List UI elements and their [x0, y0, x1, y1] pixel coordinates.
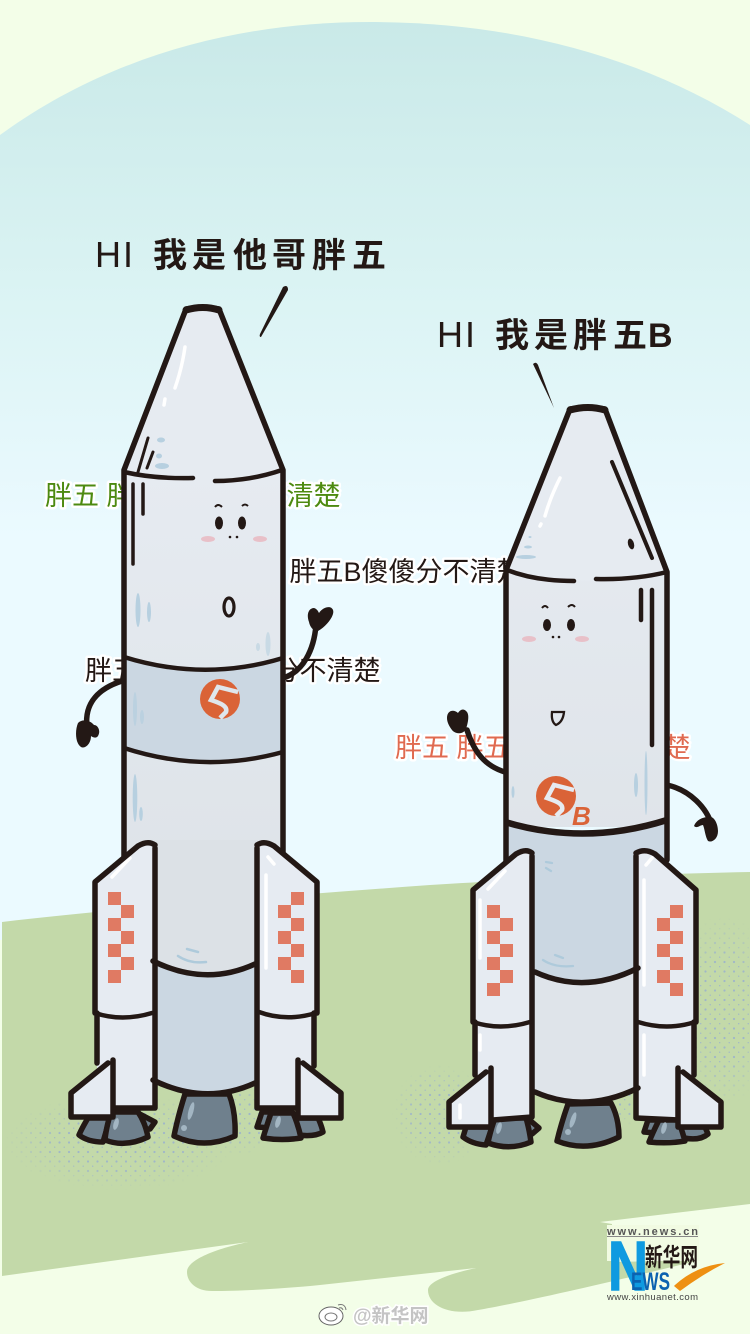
- news logo: www.xinhuanet.com: [606, 1292, 698, 1303]
- news logo: [606, 1225, 725, 1305]
- heading: small rocket speech: HI: [437, 314, 477, 355]
- body: [124, 470, 283, 860]
- left booster B: [448, 851, 532, 1127]
- highlights and stains B: [512, 478, 648, 966]
- red caption: 胖五 胖五B傻傻分不清楚: [395, 733, 691, 763]
- weibo watermark: [319, 1305, 429, 1327]
- sky dome: [0, 22, 750, 940]
- centre nozzle B: [557, 1103, 619, 1146]
- heading: small rocket speech: 是: [534, 317, 568, 355]
- green caption: 胖五 胖五B傻傻分不清楚: [45, 481, 341, 511]
- centre nozzle: [174, 1094, 235, 1143]
- heading: big rocket speech: HI: [95, 234, 135, 275]
- rocket: Long March 5B: [447, 408, 721, 1147]
- arm right: [283, 607, 333, 678]
- right booster: [257, 843, 341, 1118]
- arm left: [76, 681, 122, 747]
- lower stage: [150, 840, 258, 1094]
- heading: big rocket speech: 五: [352, 237, 386, 275]
- band with logo: [124, 656, 283, 761]
- nose cone: [124, 308, 283, 477]
- logo 5B: B: [572, 801, 591, 831]
- lower band B: [505, 820, 667, 1092]
- face: [201, 504, 267, 616]
- news logo: www.news.cn: [606, 1226, 698, 1238]
- news logo: N: [608, 1227, 648, 1305]
- core curves B: [535, 968, 638, 1102]
- logo 5: [200, 679, 240, 719]
- halftone dots on ground: [20, 924, 749, 1182]
- heading: big rocket speech: 我: [153, 237, 187, 275]
- black caption lower: 胖五 胖五B傻傻分不清楚: [85, 656, 381, 686]
- speech tick: small rocket: [533, 363, 554, 408]
- highlights and stains: [133, 347, 270, 962]
- heading: small rocket speech: 五: [613, 317, 647, 355]
- black caption upper: 胖五 胖五B傻傻分不清楚: [228, 557, 524, 587]
- heading: big rocket speech: 他: [233, 237, 267, 275]
- upper body B: [507, 572, 667, 827]
- weibo watermark: @新华网: [353, 1305, 429, 1327]
- heading: big rocket speech: 是: [192, 237, 226, 275]
- heading: big rocket speech: 胖: [312, 237, 346, 275]
- side nozzles left B: [463, 1117, 539, 1147]
- right booster B: [636, 851, 721, 1127]
- news logo: EWS: [631, 1268, 670, 1296]
- arm right B: [667, 785, 718, 842]
- heading: small rocket speech: B: [648, 317, 673, 355]
- left booster: [70, 843, 155, 1117]
- side nozzles right B: [644, 1120, 708, 1143]
- heading: big rocket speech: 哥: [272, 237, 306, 275]
- nose cone B: [507, 408, 667, 581]
- heading: small rocket speech: 我: [495, 317, 529, 355]
- speech tick: big rocket: [260, 286, 288, 337]
- side nozzles left: [79, 1112, 155, 1143]
- rocket: Long March 5: [70, 308, 341, 1143]
- news logo: 新华网: [645, 1238, 698, 1274]
- outlines B: [506, 408, 667, 866]
- outlines: [124, 308, 283, 862]
- logo 5B: [536, 776, 591, 831]
- core base curves: [153, 961, 255, 1094]
- heading: small rocket speech: 胖: [573, 317, 607, 355]
- face B: [522, 605, 589, 725]
- side nozzles right: [257, 1112, 323, 1140]
- green ground: [2, 872, 750, 1312]
- arm left B: [447, 710, 505, 772]
